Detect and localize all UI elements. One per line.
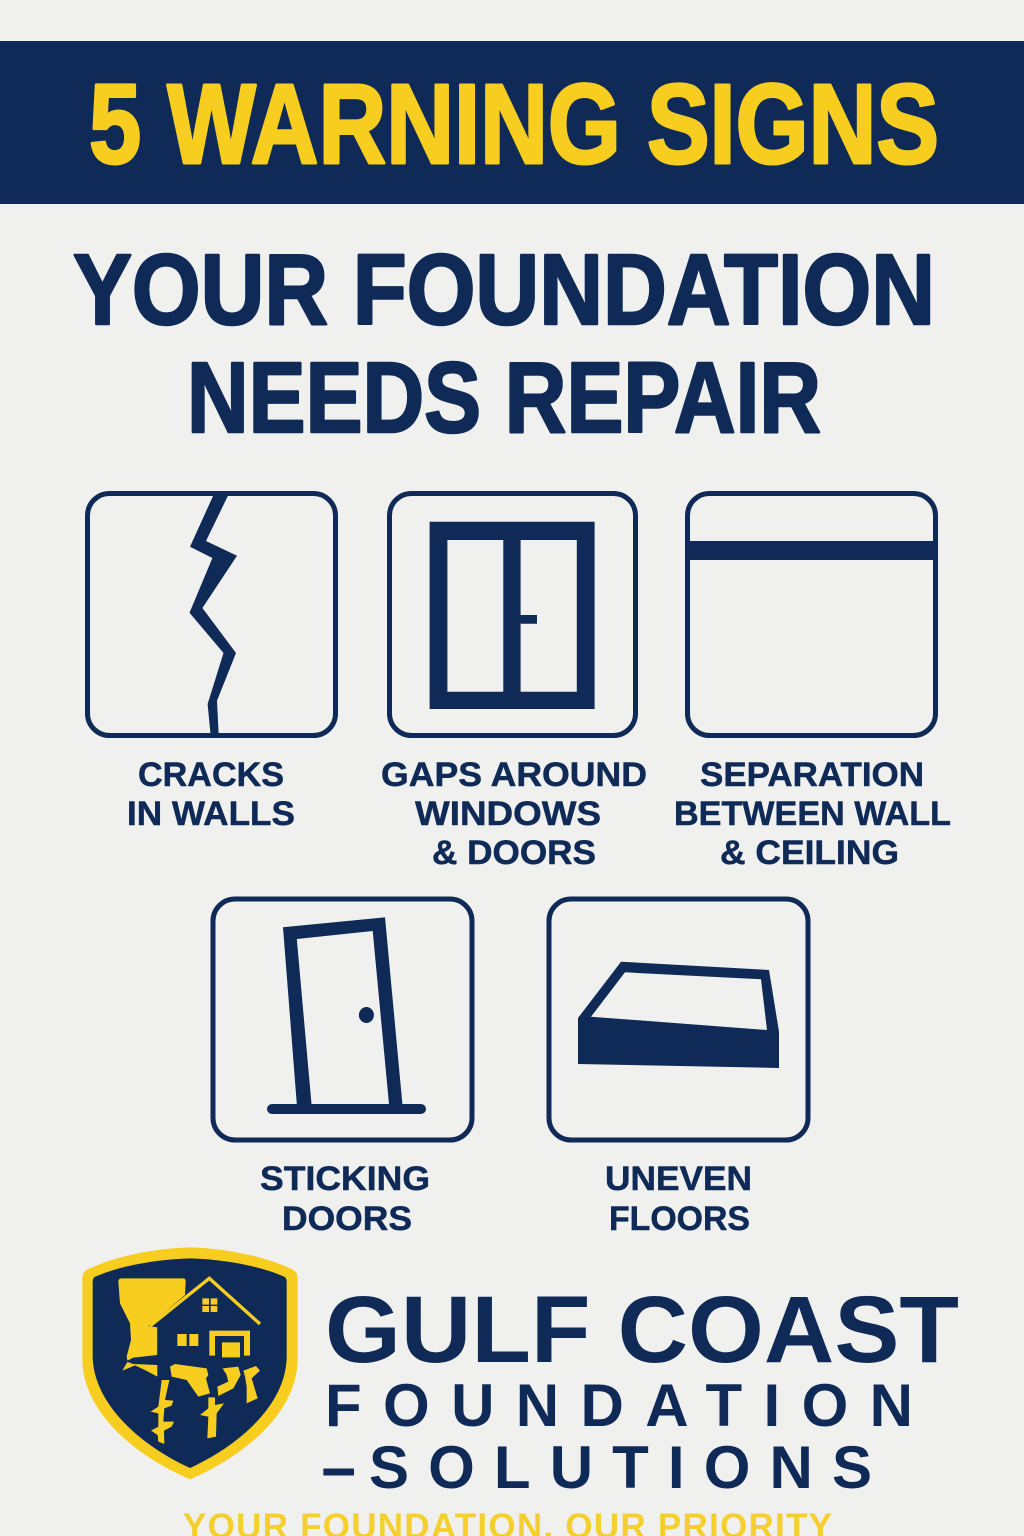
icon: tilted door [213, 899, 472, 1140]
title: NEEDS REPAIR [187, 342, 821, 454]
label: uneven floors [605, 1160, 752, 1238]
company name [322, 1277, 959, 1501]
panel: cracks in walls [88, 494, 336, 833]
company name: – [322, 1434, 355, 1501]
company name: SOLUTIONS [369, 1434, 872, 1501]
label: sticking doors: STICKING [260, 1160, 430, 1198]
label: gaps around windows and doors: WINDOWS [415, 795, 601, 833]
label: uneven floors: FLOORS [609, 1200, 750, 1238]
panel: uneven floors [549, 899, 808, 1238]
title [73, 234, 935, 454]
label: gaps around windows and doors [381, 756, 647, 872]
icon: window [390, 494, 636, 736]
label: separation between wall and ceiling: & CEILING [720, 834, 899, 872]
label: separation between wall and ceiling: SEPARATION [700, 756, 924, 794]
label: gaps around windows and doors: GAPS AROUND [381, 756, 647, 794]
icon: sloped floor [549, 899, 808, 1140]
company name: FOUNDATION [325, 1372, 913, 1439]
icon: wall crack [88, 494, 336, 736]
label: cracks in walls: CRACKS [138, 756, 284, 794]
label: gaps around windows and doors: & DOORS [432, 834, 596, 872]
icon: ceiling gap [688, 494, 936, 736]
label: separation between wall and ceiling: BETWEEN WALL [674, 795, 951, 833]
label: separation between wall and ceiling [674, 756, 951, 872]
panel: sticking doors [213, 899, 472, 1238]
label: sticking doors: DOORS [282, 1200, 412, 1238]
logo: shield with house [82, 1247, 298, 1479]
panel: separation between wall and ceiling [674, 494, 951, 872]
label: uneven floors: UNEVEN [605, 1160, 752, 1198]
label: cracks in walls: IN WALLS [127, 795, 295, 833]
title: YOUR FOUNDATION [73, 234, 935, 346]
panel: gaps around windows and doors [381, 494, 647, 872]
label: cracks in walls [127, 756, 295, 833]
label: sticking doors [260, 1160, 430, 1238]
company name: GULF COAST [325, 1277, 959, 1383]
